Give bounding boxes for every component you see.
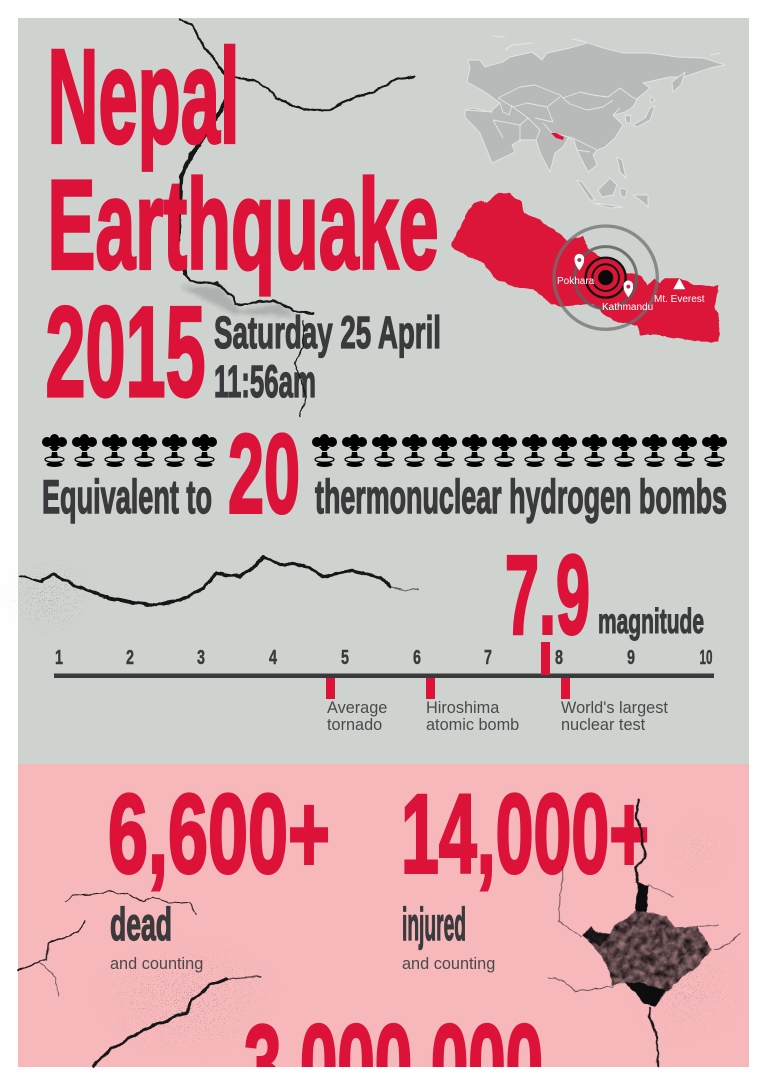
title: Earthquake: Earthquake bbox=[48, 154, 438, 296]
map: Nepal with epicentre bbox=[452, 193, 720, 342]
caption: and counting, injured: and counting bbox=[402, 955, 495, 973]
label: Hiroshima atomic bomb: atomic bomb bbox=[426, 716, 519, 734]
scale numbers: 7 bbox=[484, 647, 492, 669]
scale numbers: 10 bbox=[700, 647, 712, 669]
date text: Saturday 25 April: Saturday 25 April bbox=[214, 307, 441, 358]
text: injured bbox=[402, 898, 466, 950]
label: dead: dead bbox=[110, 898, 172, 950]
scale numbers: 1 bbox=[55, 647, 63, 669]
map: Asia locator bbox=[465, 36, 725, 208]
scale numbers: 2 bbox=[126, 647, 134, 669]
title: 2015: 2015 bbox=[46, 281, 206, 424]
figure: 20: 20 bbox=[228, 412, 300, 536]
scale numbers bbox=[55, 647, 712, 669]
label: average tornado: tornado bbox=[327, 716, 382, 734]
marker: 7.9 bbox=[541, 642, 550, 675]
marker: Hiroshima bbox=[426, 678, 435, 699]
crack: wall hole with radiating cracks bbox=[548, 800, 750, 1066]
Nepal country shape bbox=[452, 193, 720, 342]
shockwave rings bbox=[554, 226, 657, 329]
stat: 6,600+ dead: 6,600+ bbox=[108, 772, 330, 896]
label: Mt. Everest: Mt. Everest bbox=[654, 294, 705, 305]
marker: average tornado bbox=[326, 678, 335, 699]
icon row: fourteen hydrogen bombs bbox=[312, 434, 727, 467]
text: Equivalent to: Equivalent to bbox=[42, 470, 212, 523]
label: Pokhara: Pokhara bbox=[557, 276, 595, 287]
Nepal highlight on Asia map bbox=[551, 133, 564, 140]
scale numbers: 5 bbox=[341, 647, 349, 669]
scale numbers: 9 bbox=[627, 647, 635, 669]
label: World's largest nuclear test: World's largest bbox=[561, 699, 668, 717]
hole interior bbox=[583, 912, 712, 1007]
label: World's largest nuclear test: nuclear test bbox=[561, 716, 646, 734]
title: Nepal: Nepal bbox=[48, 22, 240, 172]
chart: magnitude scale bbox=[54, 642, 714, 734]
label: Kathmandu: Kathmandu bbox=[602, 302, 653, 313]
time text: 11:56am: 11:56am bbox=[214, 356, 316, 407]
crack: upper wall crack behind title bbox=[177, 20, 415, 417]
panel: pink casualties section bbox=[18, 764, 749, 1067]
scale numbers: 4 bbox=[269, 647, 278, 669]
icon row: six hydrogen bombs bbox=[42, 434, 217, 467]
label: average tornado: Average bbox=[327, 699, 387, 717]
crack: pink section left cracks bbox=[18, 892, 287, 1066]
scale numbers: 8 bbox=[555, 647, 563, 669]
pin: Pokhara bbox=[574, 254, 584, 271]
label: Hiroshima atomic bomb: Hiroshima bbox=[426, 699, 500, 717]
scale numbers: 3 bbox=[197, 647, 205, 669]
crack: middle wall crack bbox=[3, 553, 418, 640]
scale axis bbox=[54, 674, 714, 678]
icon: Mt. Everest triangle bbox=[673, 278, 685, 289]
figure: magnitude 7.9: 7.9 bbox=[505, 532, 590, 658]
pin: Kathmandu bbox=[623, 281, 633, 297]
caption: and counting, dead: and counting bbox=[110, 955, 203, 973]
scale numbers: 6 bbox=[413, 647, 421, 669]
panel: grey top section bbox=[18, 18, 749, 764]
marker: largest nuclear test bbox=[561, 678, 570, 699]
